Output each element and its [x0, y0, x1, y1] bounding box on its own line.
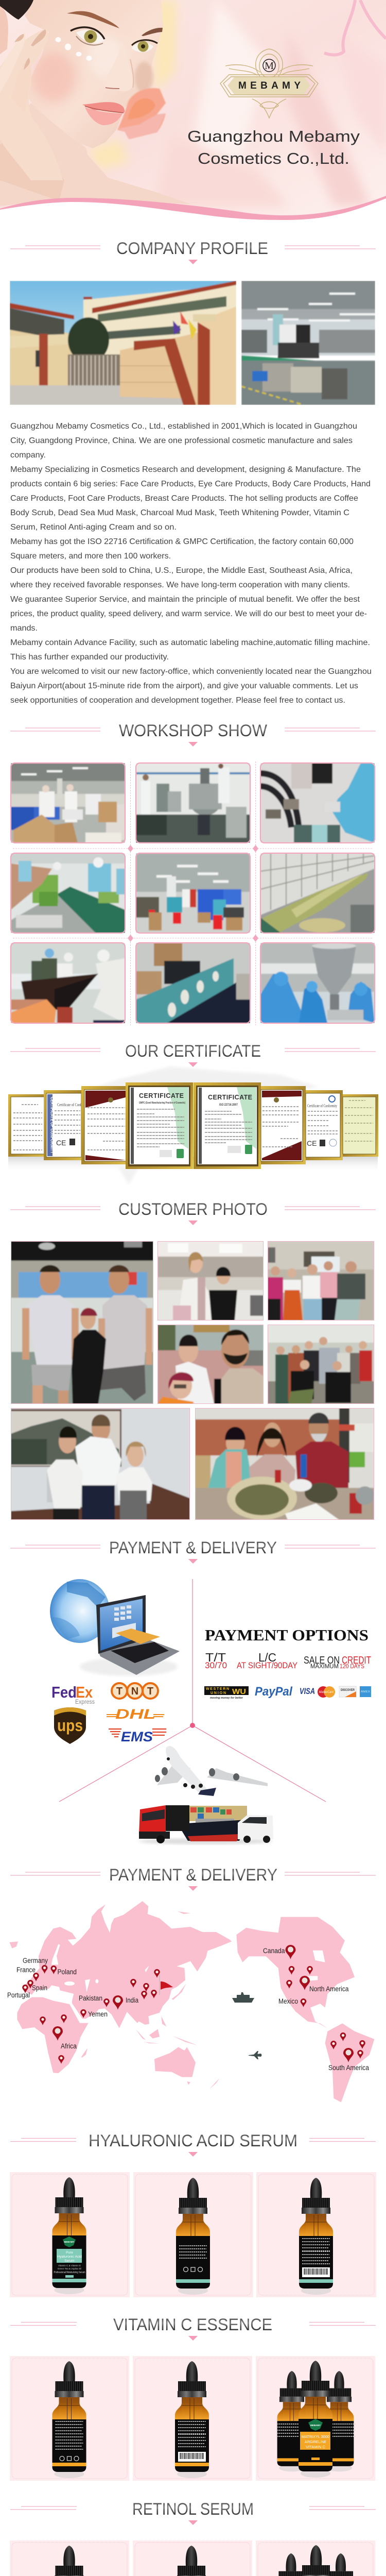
- certificate second right: CE: [307, 1139, 317, 1147]
- certificate centre left: CERTIFICATE: [139, 1092, 184, 1099]
- heading: payment and delivery map: [10, 1866, 376, 1891]
- label: vitamin c front: VITAMIN C: [306, 2446, 325, 2449]
- certificate second left: CE: [56, 1139, 66, 1147]
- rose: [117, 88, 166, 139]
- logo: FedEx Express: Fed: [51, 1683, 77, 1701]
- workshop photo 8: [136, 943, 250, 1023]
- panel: vitamin c trio: [256, 2356, 375, 2481]
- certificate second right: Certificate of Conformity: [307, 1104, 337, 1108]
- logo: Western Union: WU: [232, 1687, 246, 1696]
- certificate wall: [8, 1066, 378, 1185]
- logo: FedEx Express: Ex: [76, 1683, 93, 1701]
- company name: Guangzhou Mebamy: [187, 127, 360, 145]
- logo emblem: MEBAMY: [238, 80, 301, 91]
- panel: hyaluronic back ingredients: [256, 2172, 376, 2297]
- logo: PayPal: PayPal: [255, 1685, 293, 1699]
- panel: vitamin c directions: [10, 2356, 129, 2481]
- certificate centre right: ISO 22716:2007: [219, 1104, 238, 1107]
- certificate second left: CERTIFICATE OF CONFORMITY: [49, 1097, 55, 1154]
- company description text: You are welcomed to visit our new factory-office, which conveniently located near the Guangzhou: [10, 667, 372, 676]
- logo: EMS: EMS: [121, 1729, 153, 1744]
- logo: Western Union: WESTERN: [206, 1687, 229, 1691]
- certificate centre left: [126, 1082, 193, 1169]
- logo: Western Union: moving money for better: [210, 1697, 243, 1700]
- logo emblem: [220, 49, 318, 118]
- company description text: This has further expanded our productivity.: [10, 653, 169, 662]
- logo: TNT: N: [131, 1686, 138, 1697]
- heading: customer photo: CUSTOMER PHOTO: [118, 1200, 268, 1218]
- right eye: [132, 28, 163, 52]
- face skin: [25, 0, 163, 148]
- panel: retinol trio: [256, 2540, 375, 2576]
- world map: [7, 1901, 374, 2102]
- company description text: seek opportunities of cooperation and development together. Please feel free to contact us.: [10, 696, 345, 705]
- hero banner: [0, 0, 386, 229]
- map: Americas: [236, 1917, 374, 2102]
- workshop photo 1: [11, 763, 125, 843]
- heading: hyaluronic acid serum: [10, 2131, 376, 2157]
- company description text: Care Products, Foot Care Products, Breast Care Products. The hot selling products are Coffee: [10, 494, 358, 503]
- illustration: airplane: [155, 1746, 268, 1796]
- panel: vitamin c ingredients: [133, 2356, 252, 2481]
- heading: retinol serum: [10, 2500, 376, 2525]
- payment terms: T/T: [205, 1651, 226, 1664]
- heading: workshop show: [10, 721, 376, 747]
- map labels: Canada: [263, 1947, 285, 1955]
- logo: American Express: [360, 1686, 371, 1697]
- logo: MasterCard: [318, 1686, 335, 1698]
- workshop photo grid: [11, 761, 375, 1025]
- certificate centre right: [194, 1082, 261, 1169]
- customer photo D: [157, 1325, 264, 1404]
- panel: retinol back: [133, 2540, 252, 2576]
- company description text: We guarantee Superior Service, and maintain the principle of mutual benefit. We offer the best: [10, 595, 360, 604]
- logo: Western Union: UNION: [210, 1691, 226, 1695]
- logo: DHL: [107, 1706, 164, 1722]
- customer photo E: [268, 1325, 374, 1404]
- certificate far left: [8, 1094, 46, 1157]
- heading: company profile: COMPANY PROFILE: [116, 239, 268, 258]
- company description text: Mebamy Specializing in Cosmetics Research and development, designing & Manufacture. The: [10, 465, 361, 474]
- workshop photo 5: [136, 853, 250, 933]
- heading: our certificate: [10, 1042, 376, 1067]
- heading: retinol serum: RETINOL SERUM: [132, 2500, 254, 2518]
- map labels: Yemen: [88, 2010, 108, 2018]
- certificate second left: [44, 1090, 82, 1160]
- company description text: prices, the product quality, speed delivery, and warm service. We will do our best to meet your de-: [10, 609, 367, 618]
- company description text: Body Scrub, Dead Sea Mud Mask, Charcoal Mud Mask, Teeth Whitening Powder, Vitamin C: [10, 509, 349, 517]
- company name: [187, 127, 360, 167]
- hand and fingers: [0, 28, 63, 180]
- map labels: [7, 1947, 369, 2072]
- heading: payment and delivery: [10, 1538, 376, 1564]
- heading: workshop show: WORKSHOP SHOW: [119, 721, 268, 740]
- company description text: Baiyun Airport(about 15-minute ride from the airport), and give your valuable comments. Let us: [10, 682, 358, 690]
- neck and shoulder: [0, 103, 190, 206]
- label: hyaluronic front: MEBAMY: [64, 2241, 74, 2243]
- label: hyaluronic front: Hyaluronic Acid: [57, 2255, 82, 2259]
- woman's face: [0, 0, 190, 206]
- logo: UPS: [54, 1707, 86, 1744]
- icon: globe: [50, 1579, 110, 1643]
- company description text: Guangzhou Mebamy Cosmetics Co., Ltd., established in 2001,Which is located in Guangzhou: [10, 422, 357, 431]
- logo: UPS: ups: [57, 1716, 83, 1735]
- certificate third left: [81, 1086, 127, 1164]
- logo: TNT: [112, 1683, 158, 1699]
- panel: retinol front: [10, 2540, 129, 2576]
- heading: hyaluronic acid serum: HYALURONIC ACID SERUM: [89, 2131, 297, 2150]
- logo: Western Union: [204, 1686, 249, 1700]
- nose: [103, 46, 134, 91]
- label: vitamin c front: [300, 2419, 330, 2460]
- flag: [160, 1974, 173, 1995]
- heading: vitamin c essence: [10, 2315, 376, 2341]
- map labels: Poland: [58, 1968, 77, 1976]
- company description text: Mebamy contain Advance Facility, such as automatic labeling machine,automatic filling machine.: [10, 638, 370, 647]
- payment terms: AT SIGHT/90DAY: [237, 1660, 297, 1670]
- label: hyaluronic front: [54, 2236, 85, 2278]
- logo: FedEx Express: [51, 1683, 95, 1705]
- wave: [0, 198, 386, 229]
- logo: Visa: VISA: [300, 1686, 315, 1696]
- heading: payment and delivery map: PAYMENT & DELIVERY: [109, 1866, 277, 1884]
- map labels: Mexico: [278, 1997, 298, 2005]
- logo: TNT: T: [116, 1686, 122, 1697]
- icon: ship: [232, 1992, 254, 2003]
- company description text: City, Guangdong Province, China. We are one professional cosmetic manufacture and sales: [10, 436, 353, 445]
- customer photo F: [11, 1408, 190, 1520]
- customer photo B: [157, 1241, 264, 1320]
- map labels: India: [126, 1996, 138, 2004]
- payment terms: MAXIMUM: [310, 1663, 339, 1670]
- company description text: [10, 422, 372, 705]
- ribbon: [324, 0, 386, 55]
- panel: hyaluronic front: [10, 2172, 130, 2297]
- panel: hyaluronic back directions: [133, 2172, 253, 2297]
- company description text: Serum, Retinol Anti-aging Cream and so on.: [10, 523, 177, 532]
- label: hyaluronic front: Vitamin C & Vitamin E: [58, 2264, 81, 2267]
- customer photo A: [11, 1241, 153, 1404]
- map labels: North America: [309, 1985, 349, 1993]
- lips: [82, 102, 125, 113]
- cream dots: [56, 37, 92, 61]
- heading: company profile: [10, 239, 376, 264]
- certificate second right: [306, 1090, 343, 1160]
- label: hyaluronic front: Professional Moisturizing Serum: [54, 2271, 85, 2274]
- company description text: company.: [10, 451, 46, 460]
- label: hyaluronic front: Pure: [66, 2251, 73, 2255]
- company description text: Our products have been sold to China, U.S., Europe, the Middle East, Southeast Asia, Africa,: [10, 566, 353, 575]
- illustration: truck, ship and van: [139, 1805, 273, 1844]
- heading: customer photo: [10, 1200, 376, 1225]
- company description text: Mebamy has got the ISO 22716 Certification & GMPC Certification, the factory contain 60,000: [10, 537, 354, 546]
- icon: plane: [249, 2051, 261, 2059]
- company description text: products contain 6 big series: Face Care Products, Eye Care Products, Body Care Products, Hand: [10, 480, 371, 488]
- left eyebrow: [67, 11, 119, 28]
- heading: our certificate: OUR CERTIFICATE: [125, 1042, 261, 1060]
- map pins: [22, 1945, 365, 2064]
- logo: DHL: DHL: [115, 1706, 155, 1722]
- logo: Discover: DISCOVER: [341, 1689, 355, 1692]
- payment terms: 120 DAYS: [340, 1663, 364, 1670]
- icon: laptop with card: [80, 1595, 180, 1676]
- company description text: mands.: [10, 624, 38, 633]
- workshop photo 4: [11, 853, 125, 933]
- payment terms: [205, 1651, 371, 1670]
- logo: Discover: [339, 1686, 356, 1697]
- map labels: France: [16, 1966, 36, 1974]
- map: Europe, Asia, Africa, Oceania: [9, 1901, 232, 2089]
- company name: Cosmetics Co.,Ltd.: [198, 149, 349, 167]
- workshop photo 6: [260, 853, 375, 933]
- photo: factory building: [10, 281, 236, 405]
- heading: payment and delivery: PAYMENT & DELIVERY: [109, 1538, 277, 1557]
- workshop photo 2: [136, 763, 250, 843]
- customer photo G: [195, 1408, 374, 1520]
- map labels: Africa: [61, 2042, 77, 2050]
- left eye: [71, 27, 104, 45]
- logo: FedEx Express: Express: [75, 1698, 95, 1705]
- photo: production line: [241, 281, 375, 405]
- map labels: Pakistan: [79, 1994, 102, 2002]
- logo emblem: M: [265, 60, 274, 72]
- company description text: where they received favorable responses. We have long-term cooperation with many clients.: [10, 581, 350, 589]
- certificate second left: Certificate of Conf: [57, 1103, 81, 1107]
- payment options title: PAYMENT OPTIONS: [205, 1626, 369, 1644]
- payment method logos: [204, 1685, 371, 1700]
- logo: MasterCard: MasterCard: [319, 1691, 334, 1694]
- workshop photo 9: [260, 943, 375, 1023]
- hair and ear: [0, 0, 33, 20]
- customer photo C: [268, 1241, 374, 1320]
- workshop photo 3: [260, 763, 375, 843]
- certificate centre right: CERTIFICATE: [208, 1094, 252, 1101]
- label: vitamin c front: MATRIXYL 3000: [302, 2435, 329, 2439]
- certificate third right: [261, 1086, 306, 1164]
- label: hyaluronic front: Serum: [64, 2259, 75, 2263]
- certificate far right: [343, 1094, 378, 1157]
- payment terms: 30/70: [205, 1660, 227, 1670]
- label: vitamin c front: MEBAMY: [310, 2424, 321, 2427]
- payment terms: CREDIT: [342, 1655, 371, 1666]
- certificate centre left: GMPC (Good Manufacturing Practice of Cosmetic): [139, 1101, 185, 1105]
- logo: EMS: [109, 1729, 166, 1744]
- heading: vitamin c essence: VITAMIN C ESSENCE: [113, 2315, 272, 2334]
- payment terms: SALE ON: [304, 1655, 340, 1666]
- label: vitamin c front: ARGIRELINE: [305, 2441, 326, 2444]
- company description text: Square meters, and more then 100 workers.: [10, 552, 171, 561]
- map labels: Germany: [23, 1957, 48, 1964]
- payment divider lines: [59, 1579, 326, 1802]
- map labels: Portugal: [7, 1991, 30, 1999]
- logo: American Express: AMEX: [361, 1690, 371, 1693]
- map labels: South America: [328, 2064, 369, 2072]
- label: hyaluronic front: Green Tea & Jojoba Oil: [58, 2267, 81, 2270]
- map labels: Spain: [32, 1984, 47, 1992]
- payment terms: L/C: [258, 1651, 276, 1664]
- logo: TNT: T: [147, 1686, 153, 1697]
- workshop photo 7: [11, 943, 125, 1023]
